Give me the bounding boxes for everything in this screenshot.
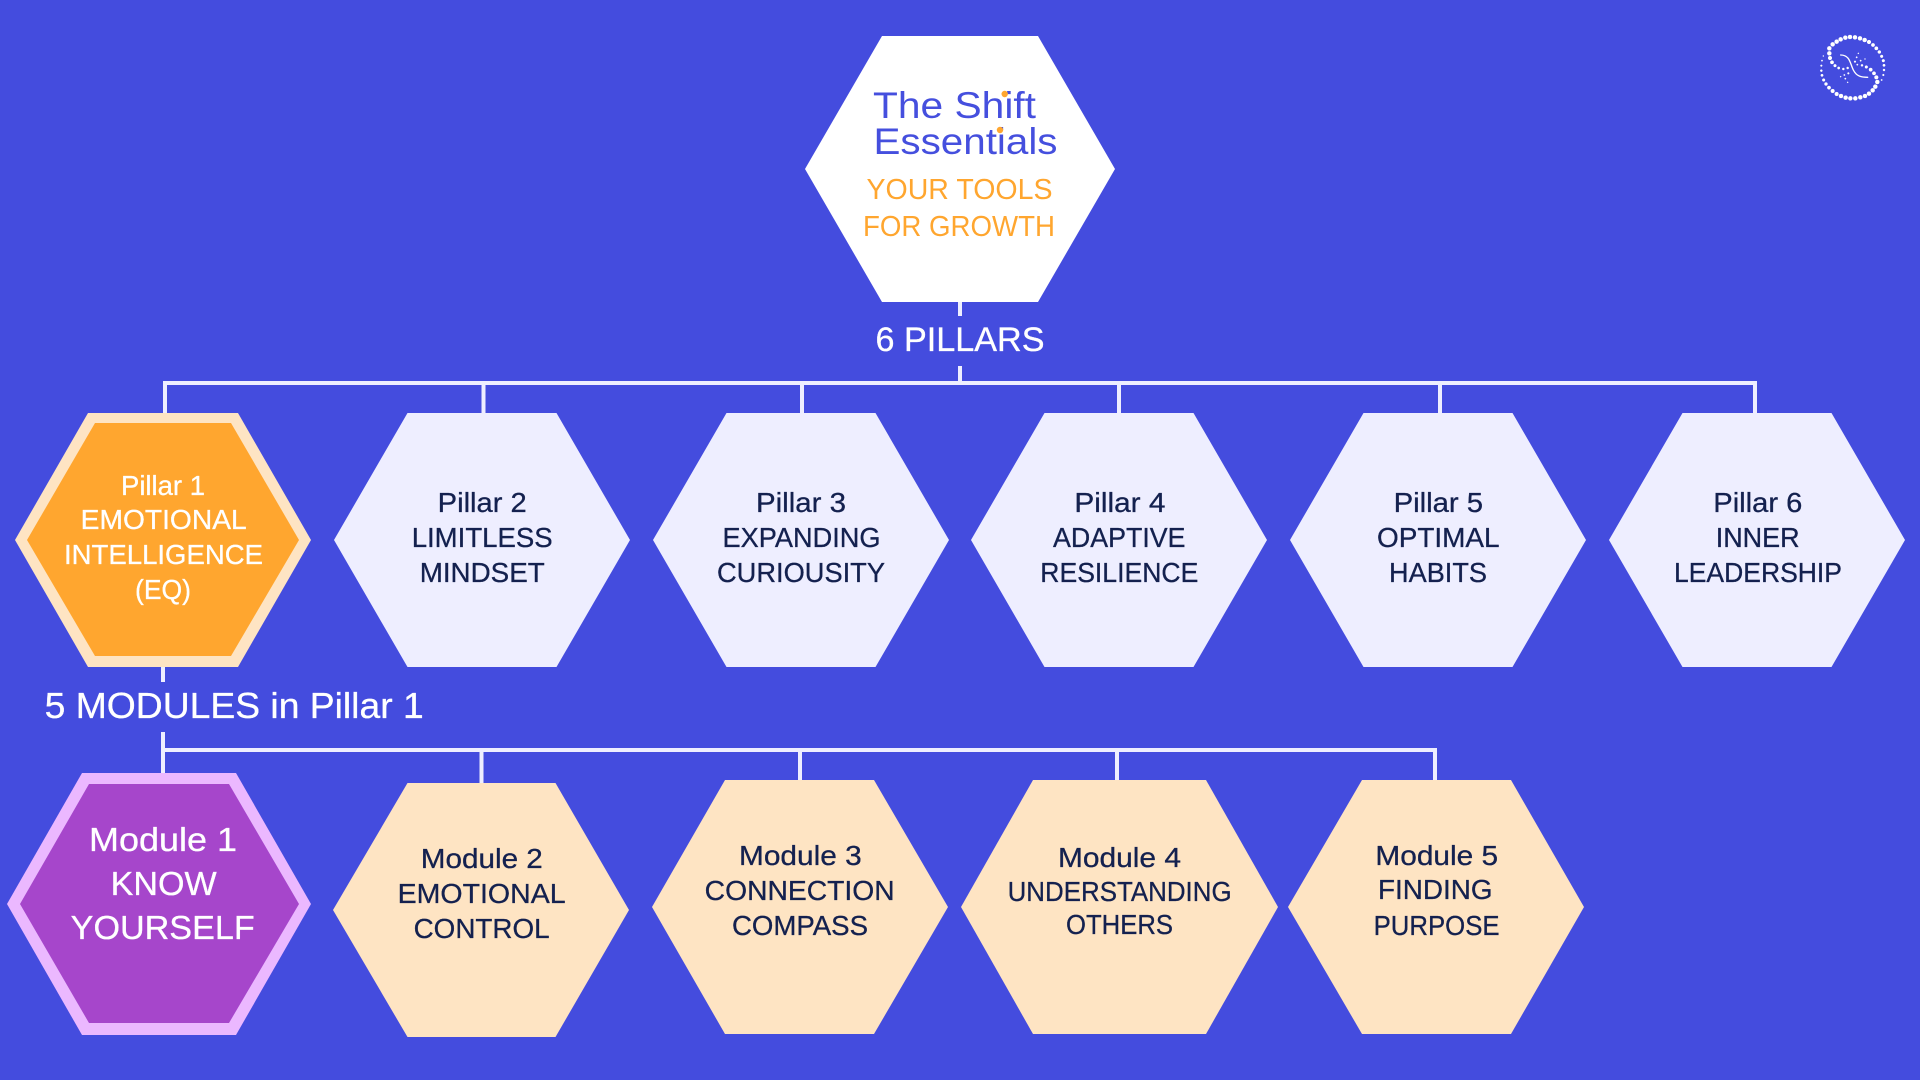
connector lines: modules tree bbox=[161, 667, 1437, 783]
text: pillar 4 label: RESILIENCE bbox=[1040, 557, 1198, 588]
icon: circular dotted logo bbox=[1820, 35, 1885, 100]
text: module 2 label: EMOTIONAL bbox=[398, 878, 566, 909]
text: pillar 1 label: (EQ) bbox=[135, 574, 191, 605]
text: module 1 label: KNOW bbox=[111, 865, 218, 902]
text: module 2 label: Module 2 bbox=[421, 843, 543, 874]
panel: module 4 bbox=[961, 780, 1278, 1034]
text: module 4 label: OTHERS bbox=[1066, 909, 1173, 940]
title: The Shift Essentials: The Shift bbox=[873, 85, 1037, 126]
text: module 5 label: FINDING bbox=[1378, 874, 1492, 905]
panel: pillar 3 bbox=[653, 413, 949, 667]
text: module 2 label: CONTROL bbox=[414, 913, 550, 944]
text: pillar 5 label bbox=[1377, 487, 1500, 588]
text: pillar 3 label: Pillar 3 bbox=[756, 487, 846, 518]
text: module 2 label bbox=[398, 843, 566, 944]
panel: pillar 2 bbox=[334, 413, 630, 667]
text: module 4 label bbox=[1008, 842, 1232, 940]
text: module 1 label: Module 1 bbox=[89, 821, 237, 858]
subtitle: your tools for growth: FOR GROWTH bbox=[863, 211, 1055, 243]
title hexagon bbox=[805, 36, 1115, 302]
text: pillar 3 label bbox=[717, 487, 885, 588]
subtitle: your tools for growth: YOUR TOOLS bbox=[866, 174, 1052, 206]
text: pillar 2 label: Pillar 2 bbox=[438, 487, 527, 518]
text: pillar 5 label: Pillar 5 bbox=[1394, 487, 1483, 518]
panel: module 1 bbox=[7, 773, 311, 1035]
icon: orange dots on the letter i bbox=[997, 91, 1008, 133]
text: module 1 label: YOURSELF bbox=[71, 909, 255, 946]
panel: pillar 5 bbox=[1290, 413, 1586, 667]
text: module 3 label bbox=[705, 840, 895, 941]
text: module 5 label bbox=[1374, 840, 1500, 941]
text: pillar 6 label: INNER bbox=[1716, 522, 1800, 553]
text: module 4 label: Module 4 bbox=[1058, 842, 1181, 873]
panel: pillar 6 bbox=[1609, 413, 1905, 667]
text: pillar 2 label: MINDSET bbox=[420, 557, 545, 588]
text: module 3 label: Module 3 bbox=[739, 840, 862, 871]
text: module 4 label: UNDERSTANDING bbox=[1008, 876, 1232, 907]
text: module 1 label bbox=[71, 821, 255, 946]
subtitle: your tools for growth bbox=[863, 174, 1055, 243]
text: pillar 5 label: OPTIMAL bbox=[1377, 522, 1500, 553]
text: pillar 6 label bbox=[1674, 487, 1842, 588]
text: module 5 label: Module 5 bbox=[1375, 840, 1498, 871]
title: The Shift Essentials bbox=[873, 85, 1058, 162]
panel: module 5 bbox=[1288, 780, 1584, 1034]
text: pillar 1 label: Pillar 1 bbox=[121, 470, 205, 501]
title: The Shift Essentials: Essentials bbox=[874, 121, 1058, 162]
heading: 6 pillars: 6 PILLARS bbox=[876, 321, 1044, 359]
text: pillar 1 label: INTELLIGENCE bbox=[64, 539, 263, 570]
text: pillar 6 label: Pillar 6 bbox=[1713, 487, 1802, 518]
panel: module 3 bbox=[652, 780, 948, 1034]
text: pillar 5 label: HABITS bbox=[1389, 557, 1487, 588]
text: module 3 label: COMPASS bbox=[732, 910, 868, 941]
panel: module 2 bbox=[333, 783, 629, 1037]
panel: pillar 4 bbox=[971, 413, 1267, 667]
text: pillar 3 label: EXPANDING bbox=[722, 522, 880, 553]
text: pillar 2 label bbox=[412, 487, 553, 588]
heading: 5 modules in pillar 1: 5 MODULES in Pillar 1 bbox=[45, 685, 424, 726]
text: pillar 6 label: LEADERSHIP bbox=[1674, 557, 1842, 588]
text: pillar 4 label bbox=[1040, 487, 1198, 588]
panel: pillar 1 bbox=[15, 413, 311, 667]
text: pillar 3 label: CURIOUSITY bbox=[717, 557, 885, 588]
text: module 5 label: PURPOSE bbox=[1374, 910, 1500, 941]
text: pillar 1 label bbox=[64, 470, 263, 605]
text: module 3 label: CONNECTION bbox=[705, 875, 895, 906]
text: pillar 4 label: Pillar 4 bbox=[1074, 487, 1165, 518]
text: pillar 1 label: EMOTIONAL bbox=[81, 504, 247, 535]
connector lines: pillars tree bbox=[163, 302, 1757, 413]
text: pillar 4 label: ADAPTIVE bbox=[1053, 522, 1186, 553]
text: pillar 2 label: LIMITLESS bbox=[412, 522, 553, 553]
